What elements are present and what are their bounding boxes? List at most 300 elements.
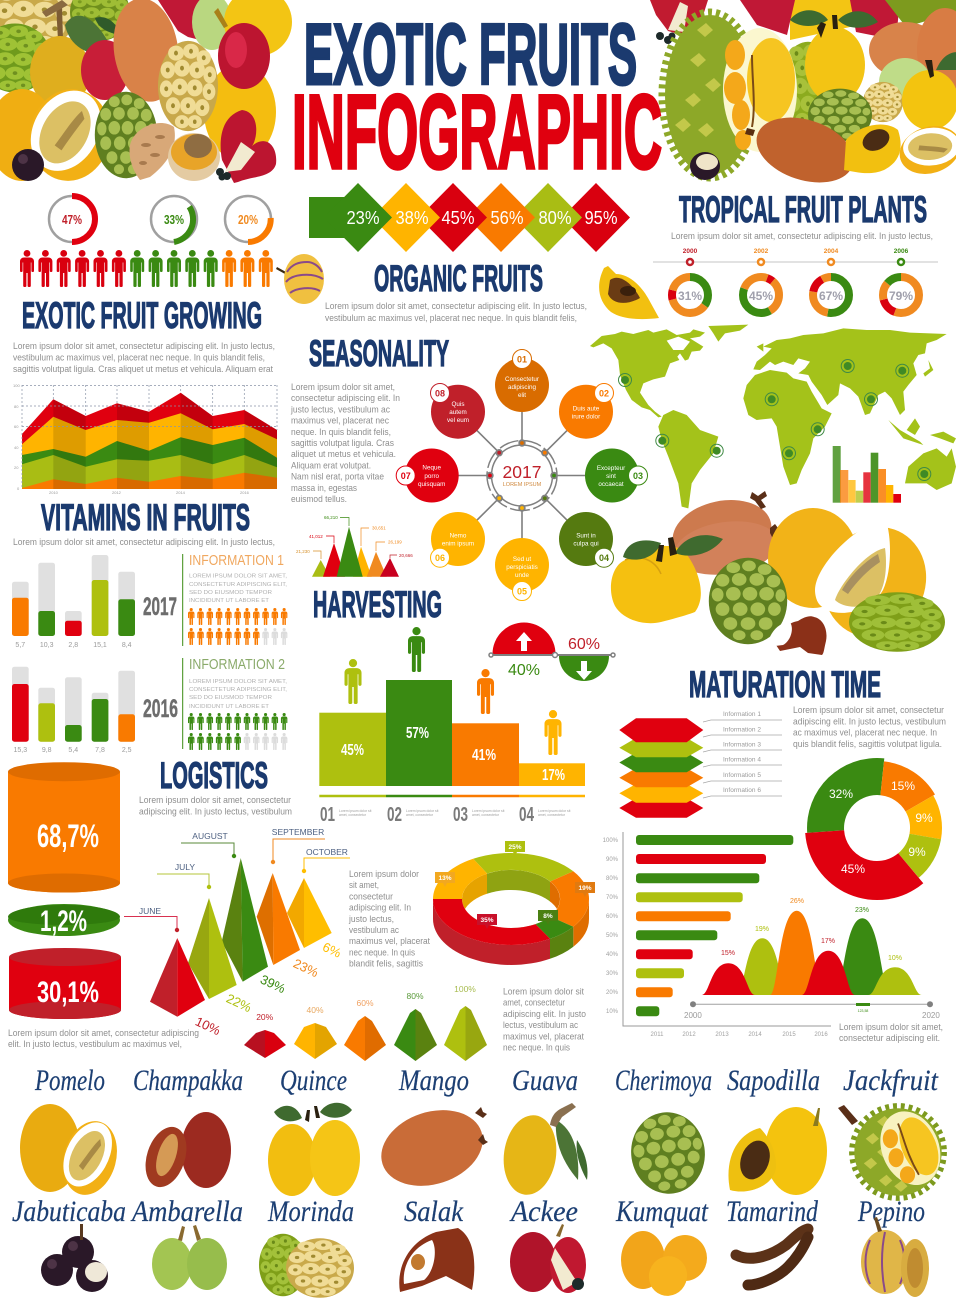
node 06	[430, 512, 485, 567]
fruit cluster: top right	[650, 0, 956, 194]
cylinder bars 2016: 7,8	[95, 747, 105, 754]
podium bars	[319, 680, 585, 796]
text block: Lorem ipsum dolor sit amet, consectetur adipiscing elit. In justo lectus,	[325, 300, 587, 311]
3d pyramid chart: AUGUST	[192, 831, 228, 841]
ambarella	[130, 1195, 243, 1290]
timeline: 2004	[824, 248, 839, 255]
node 04: 04	[599, 553, 609, 563]
text block: pyramid side: adipiscing elit. In	[349, 902, 411, 913]
hexagon legend	[703, 711, 782, 798]
people on podium	[344, 627, 562, 755]
node 06: 06	[435, 553, 445, 563]
mountain chart	[296, 515, 413, 577]
text block: pyramid side: sit amet,	[349, 879, 379, 890]
3d pyramid chart: 23%	[291, 956, 321, 980]
center label: LOREM IPSUM	[503, 482, 542, 488]
node 08: 08	[435, 388, 445, 398]
sapodilla	[727, 1064, 827, 1195]
hexagon stack	[619, 718, 703, 818]
text block: pyramids side: lectus, vestibulum ac	[503, 1019, 578, 1030]
mountain chart: 21,230	[296, 549, 310, 554]
step numbers: 03	[453, 804, 468, 826]
kumquat	[615, 1195, 709, 1300]
title	[292, 7, 662, 191]
kumquat: Kumquat	[615, 1195, 709, 1228]
donut 31%	[672, 277, 708, 313]
text block: Lorem ipsum dolor sit amet, consectetur	[139, 794, 291, 805]
horizontal bars: 2012	[682, 1032, 696, 1038]
node 06: enim ipsum	[442, 540, 474, 548]
timeline	[653, 248, 938, 265]
horizontal bars: 80%	[606, 876, 619, 882]
text block: pyramid side: consectetur	[349, 890, 393, 901]
panel: percentage arrows	[309, 183, 630, 252]
panel: harvesting	[313, 584, 615, 826]
caption: elit. In justo lectus, vestibulum ac maximus vel,	[8, 1038, 182, 1049]
donut 45%	[743, 277, 779, 313]
information 1: CONSECTETUR ADIPISCING ELIT,	[189, 582, 287, 588]
text block: Aliquam erat volutpat.	[291, 459, 371, 470]
cylinder bars 2017	[12, 555, 135, 649]
horizontal bars: 20%	[606, 990, 619, 996]
ackee: Ackee	[509, 1195, 578, 1228]
subtitle: Lorem ipsum dolor sit amet, consectetur adipiscing elit. In justo lectus,	[13, 536, 275, 547]
text block	[793, 704, 946, 749]
guava	[499, 1064, 588, 1198]
panel: logistics	[8, 755, 430, 1049]
information 1: SED DO EIUSMOD TEMPOR	[189, 590, 272, 596]
horizontal bars: 70%	[606, 895, 619, 901]
ring callouts: 19%	[578, 885, 592, 892]
year 2016: 2016	[143, 695, 178, 723]
node 01: Consectetur	[505, 376, 539, 383]
bell curve chart: 17%	[821, 938, 835, 945]
panel: percentage arrows: 56%	[490, 208, 524, 228]
cylinder bars 2016: 9,8	[42, 747, 52, 754]
text block	[325, 300, 587, 323]
step numbers: 02	[387, 804, 402, 826]
information 2	[183, 657, 287, 750]
subtitle: Lorem ipsum dolor sit amet, consectetur adipiscing elit. In justo lectus,	[671, 230, 933, 241]
donut 45%: 45%	[749, 289, 773, 303]
text block: pyramid side: maximus vel, placerat	[349, 935, 430, 946]
up and down gauge: 40%	[508, 662, 540, 679]
hexagon legend: Information 6	[723, 787, 761, 794]
horizontal bars: 2011	[651, 1032, 664, 1038]
text block: ac maximus vel, placerat nec neque. In	[793, 726, 937, 738]
caption	[839, 1021, 943, 1043]
donut 79%: 79%	[889, 289, 913, 303]
node 08: autem	[449, 409, 467, 416]
step numbers: amet, consectetur	[538, 813, 566, 817]
area chart: 20	[14, 465, 19, 470]
step numbers	[320, 804, 570, 826]
percentage rings: 33%	[164, 212, 184, 227]
text block: massa in, egestas	[291, 482, 357, 493]
step numbers: Lorem ipsum dolor sit	[472, 809, 504, 813]
jackfruit	[838, 1064, 951, 1197]
up and down gauge	[489, 622, 615, 681]
node 04: culpa qui	[573, 540, 599, 548]
cylinder bars 2017: 2,8	[68, 642, 78, 649]
donut 31%: 31%	[678, 289, 702, 303]
node 02	[559, 384, 614, 439]
pyramid 20%	[244, 1012, 286, 1058]
fruit cluster: top left	[0, 0, 292, 188]
3d pyramid chart: 10%	[193, 1014, 223, 1038]
pyramid 100%: 100%	[454, 984, 476, 994]
donut 67%: 67%	[819, 289, 843, 303]
step numbers: 04	[519, 804, 535, 826]
cherimoya: Cherimoya	[615, 1064, 712, 1097]
percentage rings: 20%	[238, 212, 258, 227]
pyramid 20%: 20%	[256, 1012, 274, 1022]
3d pyramid chart: SEPTEMBER	[272, 827, 324, 837]
champakka: Champakka	[133, 1064, 243, 1097]
information 1: INCIDIDUNT UT LABORE ET	[189, 598, 270, 604]
jackfruit: Jackfruit	[843, 1064, 939, 1097]
donut chart: 32%	[829, 787, 853, 801]
horizontal bars	[603, 832, 831, 1038]
percentage rings: 47%	[62, 212, 82, 227]
horizontal bars: 2013	[715, 1032, 729, 1038]
node 01: elit	[518, 392, 526, 399]
horizontal bars: 50%	[606, 933, 619, 939]
tamarind	[726, 1195, 819, 1285]
heading: LOGISTICS	[160, 755, 268, 796]
text block: pyramids side: Lorem ipsum dolor sit	[503, 986, 584, 996]
cylinder bars 2017: 5,7	[15, 642, 25, 649]
node 07: 07	[401, 471, 411, 481]
area chart: 0	[17, 486, 20, 491]
morinda	[259, 1195, 354, 1298]
pyramid 60%: 60%	[356, 998, 374, 1008]
node 06: Nemo	[450, 532, 467, 540]
heading: SEASONALITY	[309, 333, 449, 374]
timeline: 2020	[922, 1011, 940, 1020]
caption: consectetur adipiscing elit.	[839, 1032, 940, 1043]
salak: Salak	[404, 1195, 464, 1228]
hexagon legend: Information 2	[723, 726, 761, 734]
cylinder 30,1%: 30,1%	[37, 976, 99, 1009]
text block: Lorem ipsum dolor sit amet,	[291, 381, 395, 392]
title line: exotic fruits: EXOTIC FRUITS	[304, 7, 637, 103]
step numbers: Lorem ipsum dolor sit	[538, 809, 570, 813]
cylinder bars 2017: 15,1	[93, 642, 107, 649]
text block: Lorem ipsum dolor sit amet, consectetur	[793, 704, 944, 715]
node 05: Sed ut	[513, 556, 531, 563]
area chart: 2010	[49, 490, 59, 495]
information 2: INCIDIDUNT UT LABORE ET	[189, 704, 270, 710]
ambarella: Ambarella	[130, 1195, 243, 1228]
heading: VITAMINS IN FRUITS	[41, 497, 250, 538]
guava: Guava	[512, 1064, 578, 1097]
fruit cluster: center right	[611, 491, 945, 655]
node 03: occaecat	[598, 481, 624, 488]
3d pyramid chart: 39%	[258, 972, 288, 996]
pomelo	[20, 1064, 126, 1201]
information 2: CONSECTETUR ADIPISCING ELIT,	[189, 687, 287, 693]
node 01	[495, 350, 549, 412]
text block: pyramids side: maximus vel, placerat	[503, 1030, 584, 1041]
pyramid 100%	[444, 984, 487, 1061]
jabuticaba	[12, 1195, 126, 1292]
cylinder bars 2016: 5,4	[68, 747, 78, 754]
text block: maximus vel, placerat nec	[291, 415, 389, 426]
bell curve chart: 10%	[888, 955, 902, 962]
mountain chart: 66,210	[324, 515, 338, 520]
node 05: 05	[517, 586, 527, 596]
cylinder 1,2%: 1,2%	[40, 905, 87, 938]
node 02: 02	[599, 388, 609, 398]
text block: pyramids side: adipiscing elit. In justo	[503, 1008, 586, 1019]
donut 79%	[883, 277, 919, 313]
donut chart: 9%	[915, 811, 933, 825]
cylinder bars 2016: 2,5	[122, 747, 132, 754]
year 2017: 2017	[143, 593, 177, 621]
cylinder bars 2017: 10,3	[40, 642, 54, 649]
timeline: 2006	[894, 248, 909, 255]
donut 67%	[813, 277, 849, 313]
stepped pyramids	[244, 984, 487, 1061]
icon: sapodilla half	[599, 266, 659, 319]
text block: Nam nisl erat, porta vitae	[291, 471, 384, 482]
cherimoya	[615, 1064, 712, 1199]
podium bars: 57%	[406, 725, 429, 742]
panel: percentage arrows: 80%	[538, 208, 572, 228]
mountain chart: 41,012	[309, 534, 323, 539]
3d pyramid chart: 6%	[320, 939, 344, 961]
node 07: quisquam	[418, 481, 445, 488]
3d pyramid chart: JUNE	[139, 906, 161, 916]
panel: vitamins in fruits	[12, 497, 287, 754]
information 2: LOREM IPSUM DOLOR SIT AMET,	[189, 679, 287, 685]
bell curve chart: 26%	[790, 898, 804, 905]
sapodilla: Sapodilla	[727, 1064, 820, 1097]
text block: vestibulum ac maximus vel, placerat nec neque. In quis blandit felis,	[13, 352, 265, 362]
panel: percentage arrows: 23%	[346, 208, 380, 228]
3d pyramid chart: OCTOBER	[306, 847, 348, 857]
text block: euismod tellus.	[291, 493, 347, 504]
node 08: Quis	[452, 401, 464, 408]
caption: Lorem ipsum dolor sit amet,	[839, 1021, 943, 1032]
3d pyramid chart: 22%	[224, 991, 254, 1015]
mango	[371, 1064, 493, 1198]
pyramid 60%	[344, 998, 386, 1061]
text block: vestibulum ac maximus vel, placerat nec neque. In quis blandit felis,	[325, 312, 577, 323]
cylinder 30,1%	[9, 948, 121, 1019]
3d pyramid chart	[124, 827, 350, 1038]
node 05: perspiciatis	[506, 564, 538, 571]
hexagon legend: Information 1	[723, 711, 761, 718]
people row	[20, 250, 273, 287]
text block: consectetur adipiscing elit. In	[291, 392, 400, 403]
heading: EXOTIC FRUIT GROWING	[22, 295, 262, 336]
bell curve chart: 15%	[721, 950, 735, 957]
node 05: unde	[515, 572, 529, 579]
panel: percentage arrows: 95%	[584, 208, 618, 228]
text block	[290, 381, 400, 504]
mountain chart: 26,199	[388, 540, 402, 544]
podium bars: 41%	[472, 747, 496, 764]
pepino	[857, 1195, 929, 1297]
world map	[590, 325, 956, 508]
pyramid 40%: 40%	[306, 1005, 324, 1015]
text block: quis blandit felis, sagittis volutpat ligula.	[793, 738, 942, 749]
tamarind: Tamarind	[726, 1195, 819, 1228]
information 2: INFORMATION 2	[189, 657, 285, 673]
timeline: 2002	[754, 248, 769, 255]
node 08	[430, 384, 485, 439]
month callouts	[124, 839, 350, 928]
hexagon legend: Information 4	[723, 756, 761, 764]
center label: 2017	[503, 462, 541, 482]
quince: Quince	[280, 1064, 347, 1097]
panel: tropical fruit plants	[653, 189, 938, 313]
pyramid 80%	[394, 991, 437, 1061]
step numbers: amet, consectetur	[472, 813, 500, 817]
area chart: 2012	[112, 490, 122, 495]
horizontal bars: 2014	[748, 1032, 762, 1038]
text block: pyramid side: blandit felis, sagittis	[349, 958, 423, 969]
cylinder 68,7%: 68,7%	[37, 818, 99, 854]
fruit catalog: first row	[20, 1064, 951, 1201]
horizontal bars: 30%	[606, 971, 619, 977]
area chart: 2014	[176, 490, 186, 495]
up and down gauge: 60%	[568, 636, 600, 653]
node 05	[495, 538, 549, 600]
hexagon legend: Information 5	[723, 772, 761, 779]
node 01: adipiscing	[508, 384, 536, 391]
pyramid 80%: 80%	[406, 991, 424, 1001]
cylinder 1,2%	[8, 904, 120, 938]
node 03: sint	[606, 473, 616, 480]
node 03: Excepteur	[597, 465, 625, 472]
text block: pyramids side	[503, 986, 586, 1052]
text block: pyramids side: nec neque. In quis	[503, 1042, 570, 1052]
bar chart on map	[833, 446, 901, 503]
cylinder 68,7%	[8, 762, 120, 893]
node 08: vel eum	[447, 417, 469, 424]
pyramid 40%	[294, 1005, 337, 1059]
text block: adipiscing elit. In justo lectus, vestibulum	[139, 806, 292, 816]
information 2: SED DO EIUSMOD TEMPOR	[189, 695, 272, 701]
salak	[399, 1195, 474, 1292]
podium bars: 45%	[341, 742, 364, 759]
morinda: Morinda	[267, 1195, 354, 1228]
text block: sagittis volutpat ligula. Cras	[291, 437, 394, 448]
area chart: 100	[13, 383, 20, 388]
champakka	[133, 1064, 243, 1192]
node 07	[396, 448, 459, 502]
information 1: LOREM IPSUM DOLOR SIT AMET,	[189, 574, 287, 580]
text block: Lorem ipsum dolor sit amet, consectetur adipiscing elit. In justo lectus,	[13, 340, 275, 351]
mango: Mango	[398, 1064, 469, 1097]
timeline: 2000	[684, 1011, 702, 1020]
text block: pyramid side	[348, 868, 430, 969]
text block: neque. In quis blandit felis,	[291, 426, 391, 437]
donut chart	[805, 758, 942, 900]
cylinder bars 2016	[12, 667, 135, 754]
podium bars: 17%	[542, 767, 565, 784]
ring callouts: 13%	[438, 875, 452, 882]
text block: sagittis volutpat ligula. Cras aliquet ut metus et vehicula. Aliquam erat	[13, 363, 273, 374]
radial diagram	[396, 350, 648, 600]
ackee	[509, 1195, 586, 1293]
fruit catalog: second row	[12, 1195, 929, 1300]
text block: pyramids side: amet, consectetur	[503, 997, 565, 1008]
ring callouts	[435, 841, 595, 929]
area chart	[13, 383, 277, 495]
mountain chart: 30,651	[372, 526, 386, 530]
panel: organic fruits	[325, 258, 587, 323]
text block	[139, 794, 292, 816]
bell curve chart: 23%	[855, 907, 869, 914]
text block: pyramid side: Lorem ipsum dolor	[349, 868, 419, 879]
pomelo: Pomelo	[34, 1064, 105, 1097]
text block: pyramid side: vestibulum ac	[349, 924, 399, 935]
timeline: 2000	[683, 248, 698, 255]
node dots	[487, 440, 557, 511]
horizontal bars: 60%	[606, 914, 619, 920]
area chart: 60	[14, 424, 19, 429]
3d pyramid chart: JULY	[175, 862, 195, 872]
panel: maturation time	[603, 664, 946, 1043]
node 03: 03	[633, 471, 643, 481]
caption	[8, 1027, 199, 1049]
heading: HARVESTING	[313, 584, 442, 625]
step numbers: 01	[320, 804, 335, 826]
cylinder bars 2016: 15,3	[13, 747, 27, 754]
donut chart: 15%	[891, 779, 915, 793]
node 03	[585, 448, 648, 502]
node 07: Neque	[422, 464, 441, 472]
area chart: 80	[14, 404, 19, 409]
text block	[13, 340, 275, 374]
node 07: porro	[424, 473, 440, 480]
heading: ORGANIC FRUITS	[374, 258, 543, 299]
ring callouts: 25%	[508, 844, 522, 851]
cylinder bars 2017: 8,4	[122, 642, 132, 649]
horizontal bars: 90%	[606, 857, 619, 863]
node 04: Sunt in	[576, 532, 596, 540]
donut chart: 45%	[841, 862, 865, 876]
percentage rings	[49, 196, 271, 242]
information 1: INFORMATION 1	[189, 553, 284, 569]
horizontal bars: 40%	[606, 952, 619, 958]
step numbers: Lorem ipsum dolor sit	[339, 809, 371, 813]
area chart: 40	[14, 445, 19, 450]
node 01: 01	[517, 354, 527, 364]
hexagon legend: Information 3	[723, 742, 761, 748]
quince	[268, 1064, 360, 1196]
node 02: Duis aute	[573, 406, 600, 412]
panel: percentage arrows: 45%	[442, 208, 474, 228]
node 04	[559, 512, 614, 567]
step numbers: Lorem ipsum dolor sit	[406, 809, 438, 813]
3d ring chart	[433, 841, 595, 965]
text block: pyramid side: justo lectus,	[348, 913, 394, 924]
step numbers: amet, consectetur	[339, 813, 367, 817]
horizontal bars: 10%	[606, 1009, 619, 1015]
ring callouts: 8%	[543, 913, 553, 920]
horizontal bars: 2016	[814, 1032, 828, 1038]
step numbers: amet, consectetur	[406, 813, 434, 817]
area chart: 2016	[240, 490, 250, 495]
horizontal bars: 100%	[603, 838, 619, 844]
horizontal bars: 2015	[782, 1032, 796, 1038]
panel: percentage arrows: 38%	[396, 208, 428, 228]
